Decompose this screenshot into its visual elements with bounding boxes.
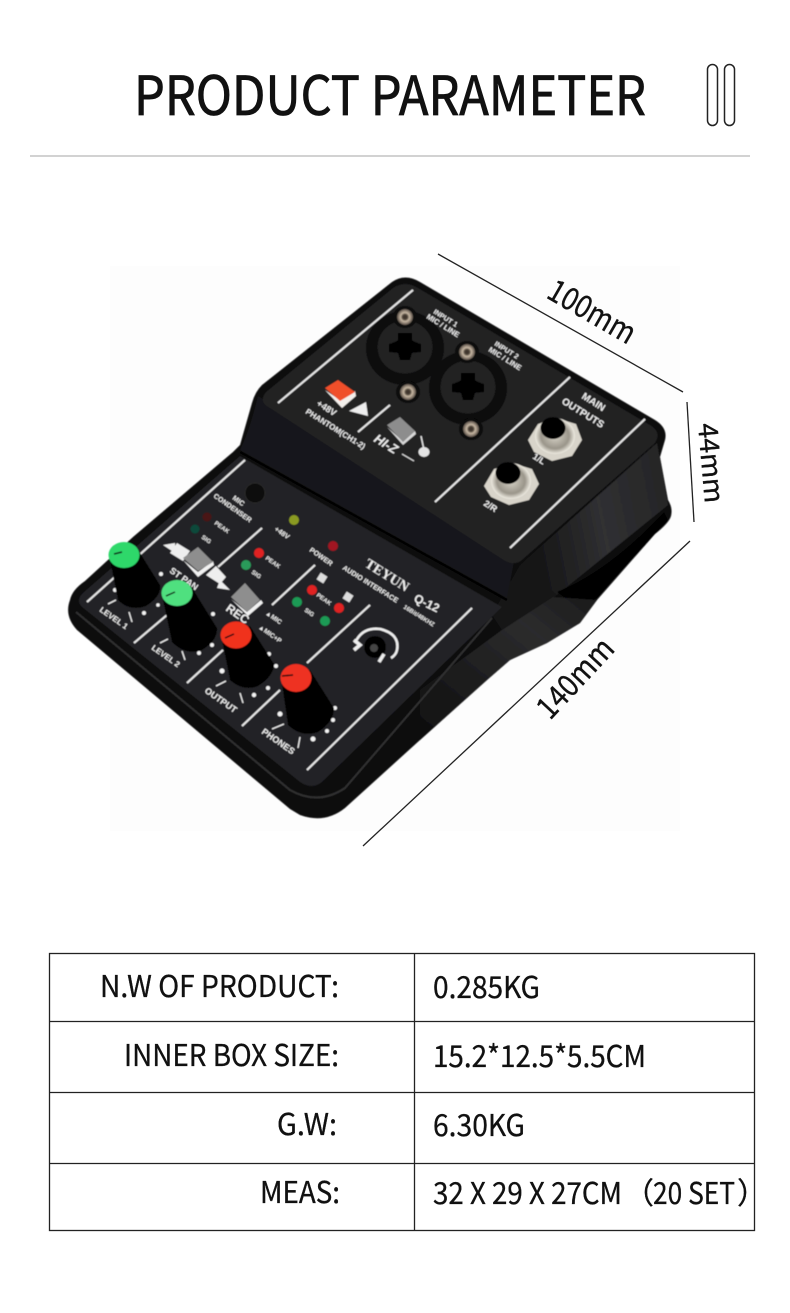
knob: output <box>220 622 274 688</box>
row: measurements: MEAS: <box>260 1168 340 1212</box>
XLR combo input 1 <box>366 311 444 385</box>
Hi-Z button <box>387 417 416 445</box>
row: inner box size: 15.2*12.5*5.5CM <box>433 1032 646 1076</box>
knob scale dots <box>113 572 337 742</box>
rear panel labels <box>304 309 607 514</box>
front panel labels: SIG <box>250 570 262 581</box>
title: PRODUCT PARAMETER <box>134 52 646 131</box>
knob tick marks <box>108 600 300 748</box>
rear panel labels: MAIN <box>579 391 607 414</box>
upper front side face <box>492 565 557 630</box>
rear panel labels: 1/L <box>531 451 548 467</box>
XLR combo input 2 <box>429 351 507 425</box>
dimension: 140mm <box>363 541 690 846</box>
front panel labels: OUTPUT <box>203 685 239 715</box>
knob: level 2 <box>162 580 217 652</box>
product photo backdrop <box>110 266 680 831</box>
rear panel labels: HI-Z <box>371 431 402 457</box>
front panel labels: CONDENSER <box>212 493 253 524</box>
front panel labels: PEAK <box>264 556 281 571</box>
row: gross weight: G.W: <box>277 1100 337 1144</box>
panel divider lines <box>87 290 645 770</box>
front panel labels: ▲MIC+P <box>257 624 283 645</box>
dark recess under rear <box>557 512 668 604</box>
row: net weight: N.W OF PRODUCT: <box>100 962 339 1006</box>
front panel labels: PEAK <box>213 521 230 536</box>
knob: level 1 <box>108 542 160 608</box>
front panel labels: MIC <box>231 495 245 508</box>
front panel labels: SIG <box>303 608 315 619</box>
row: inner box size: INNER BOX SIZE: <box>124 1031 339 1075</box>
rear panel labels: +48V <box>315 398 338 418</box>
LED indicators <box>190 512 344 626</box>
front panel labels: LEVEL 1 <box>98 605 130 631</box>
phantom power button <box>325 380 356 408</box>
ST PAN switch <box>163 543 230 590</box>
icon: guitar <box>419 436 429 456</box>
lower front side face <box>420 597 597 740</box>
row: net weight <box>100 962 540 1007</box>
rear side face <box>520 443 668 595</box>
front panel labels: LEVEL 2 <box>150 643 182 669</box>
front panel labels: REC <box>223 601 252 627</box>
mixer body silhouette <box>68 278 672 818</box>
front panel labels: SIG <box>200 535 212 546</box>
rear panel labels: OUTPUTS <box>559 396 606 431</box>
dimension: 100mm: 100mm <box>540 266 646 353</box>
front panel labels: TEYUN <box>362 557 411 595</box>
knob: phones <box>280 664 334 734</box>
front panel labels: PHONES <box>260 726 297 756</box>
rear panel labels: INPUT 2 <box>493 341 520 361</box>
front panel labels: ST PAN <box>168 565 200 592</box>
row: measurements: （ <box>624 1169 654 1213</box>
crease between slope and front panel <box>240 452 507 600</box>
row: measurements <box>260 1168 767 1213</box>
front panel labels: +48V <box>273 526 291 541</box>
XLR screws <box>393 306 483 440</box>
front panel labels: PEAK <box>315 593 332 608</box>
row: net weight: 0.285KG <box>433 963 540 1007</box>
dimension: 100mm <box>438 254 683 392</box>
mini jack: mic condenser <box>245 483 265 503</box>
front panel labels: AUDIO INTERFACE <box>341 565 399 605</box>
icon: double pill marks <box>708 64 734 126</box>
output jack 2 <box>484 462 539 505</box>
output jack 1 <box>528 417 582 461</box>
parameter table <box>49 953 767 1230</box>
rear panel labels: MIC / LINE <box>487 345 523 372</box>
REC switch <box>231 583 263 616</box>
dimension: 44mm <box>687 402 736 522</box>
product illustration: audio mixer <box>68 278 672 818</box>
row: measurements: 32 X 29 X 27CM <box>433 1169 622 1213</box>
table grid <box>49 953 755 1230</box>
rear panel labels: 2/R <box>482 498 500 514</box>
front panel labels: POWER <box>308 547 334 568</box>
rear panel labels: PHANTOM(CH1-2) <box>304 407 367 451</box>
front panel labels: ▲MIC <box>264 610 283 626</box>
front panel labels: Q-12 <box>412 591 442 616</box>
L and R marks <box>316 572 354 603</box>
front panel labels: 16Bit/48KHZ <box>402 605 435 629</box>
header rule <box>30 155 750 157</box>
rear top panel <box>263 284 658 563</box>
dimension: 140mm: 140mm <box>524 626 623 727</box>
sloped middle section <box>240 396 515 598</box>
front panel labels <box>98 493 442 756</box>
icon: warning triangle <box>349 402 368 416</box>
rear panel labels: INPUT 1 <box>432 309 459 329</box>
row: gross weight <box>277 1100 525 1145</box>
dimension: 44mm: 44mm <box>690 421 736 504</box>
row: measurements: 20 SET <box>653 1169 735 1213</box>
front rim <box>76 612 492 798</box>
row: measurements: ） <box>737 1169 767 1213</box>
row: gross weight: 6.30KG <box>433 1101 525 1145</box>
row: inner box size <box>124 1031 646 1076</box>
rear panel labels: MIC / LINE <box>425 312 461 339</box>
headphone jack with icon <box>354 629 397 662</box>
front top panel <box>79 456 502 786</box>
